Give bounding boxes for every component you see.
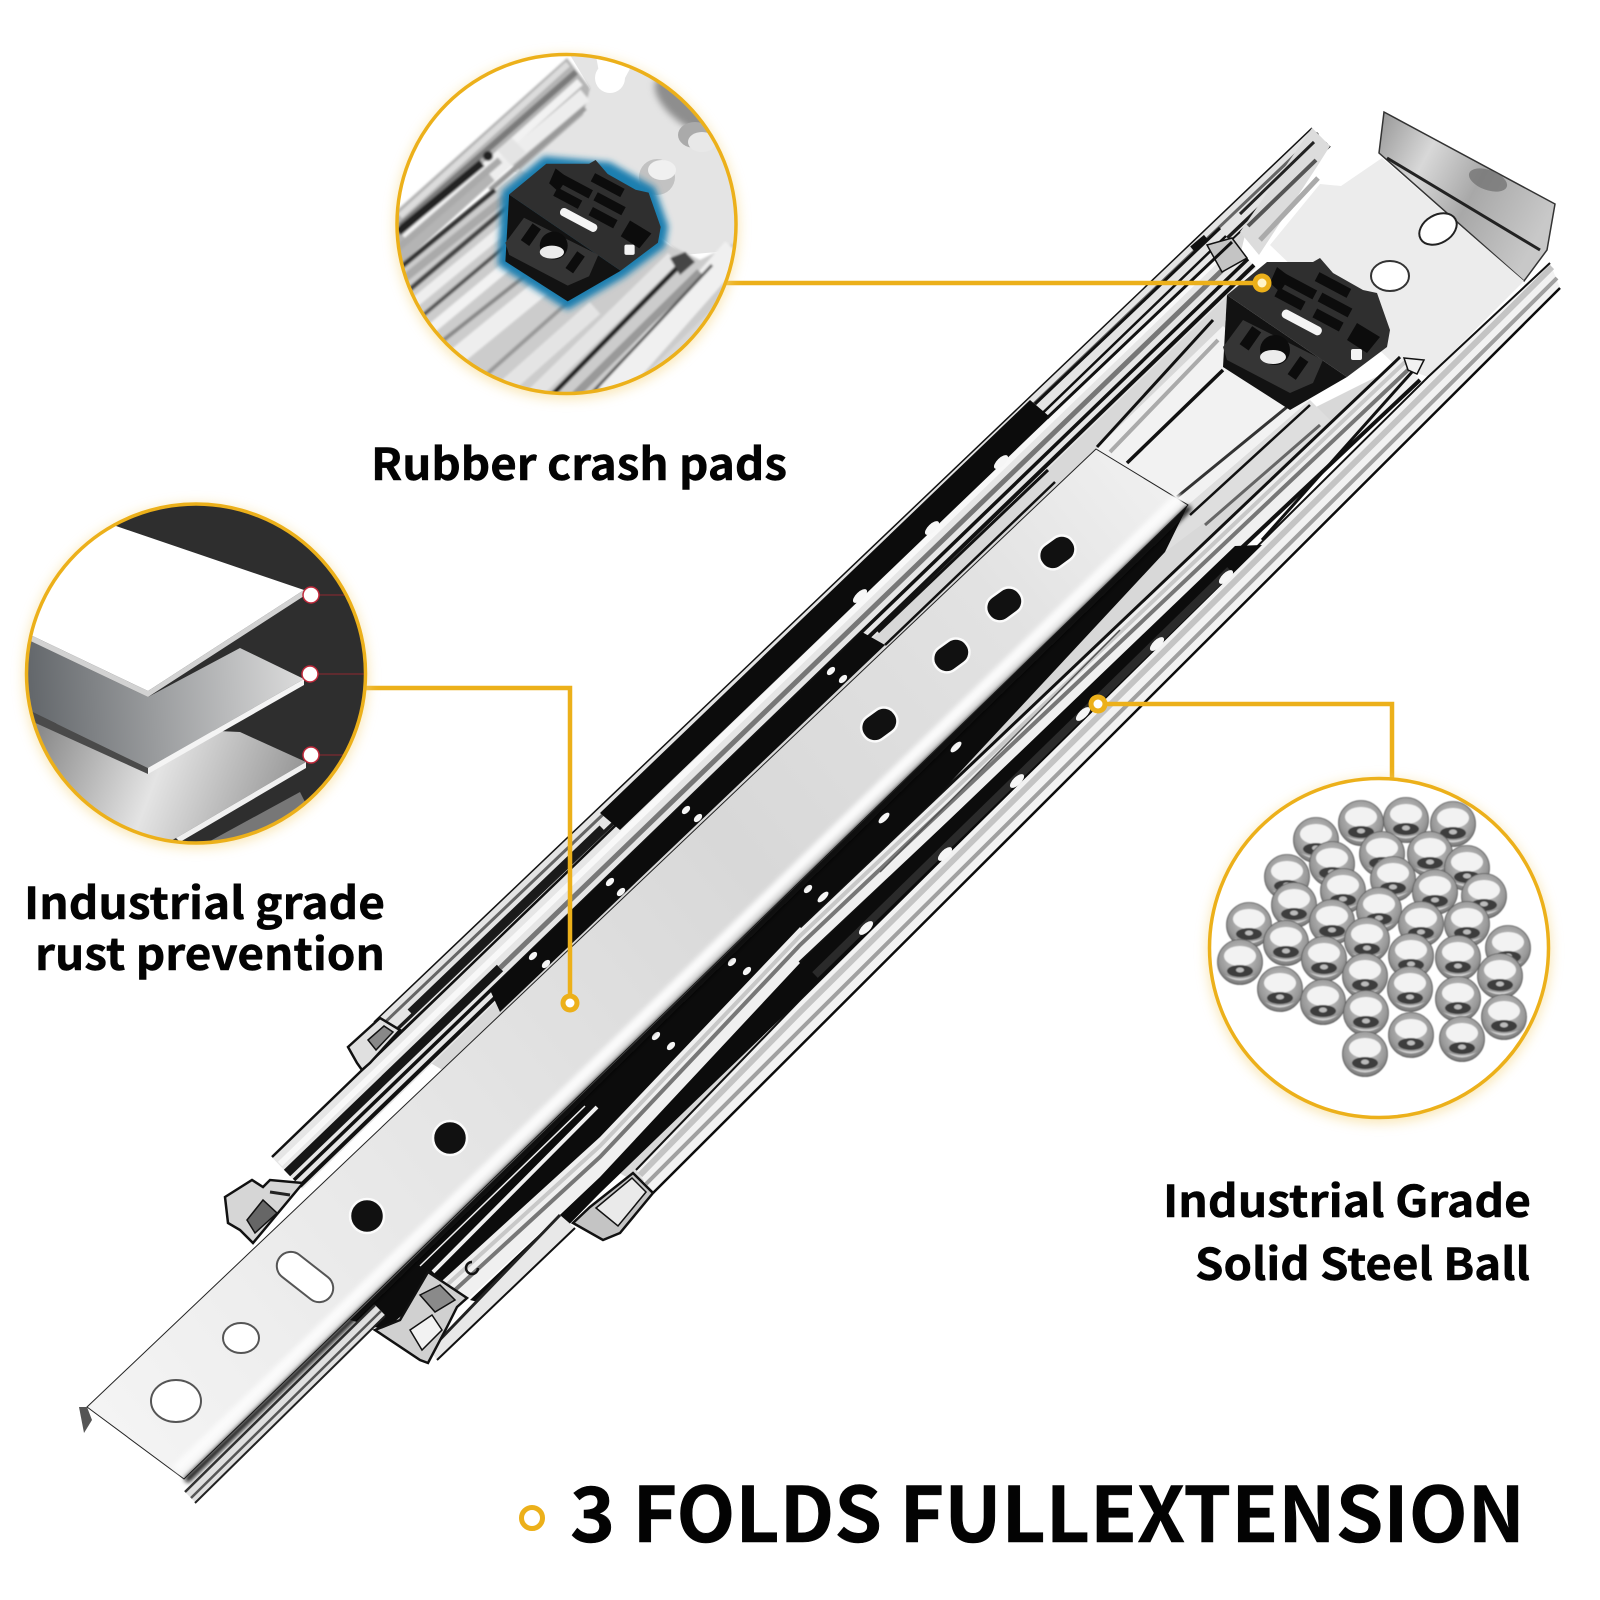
- near-end bracket: top rail: [348, 1018, 400, 1070]
- rear rubber crash pad: [1223, 258, 1390, 410]
- black ball-race strips: [350, 228, 1412, 1330]
- steel balls cluster: [1218, 798, 1530, 1076]
- callout dot: steel ball: [1088, 694, 1108, 714]
- label: rubber crash pads: Rubber crash pads: [371, 429, 787, 493]
- chrome rails lower: [395, 190, 595, 395]
- coating sheet 2: [20, 636, 304, 774]
- panel: rust prevention layers circle: [20, 500, 370, 852]
- callout line: steel ball: [1088, 694, 1392, 781]
- near-end thin rail: [430, 1215, 575, 1360]
- label: industrial grade rust prevention: rust prevention: [35, 919, 385, 983]
- far mounting plate: [1270, 158, 1524, 377]
- label: industrial grade solid steel ball: Industrial Grade: [1163, 1166, 1531, 1230]
- panel: rubber crash pad detail circle: [390, 50, 745, 400]
- far mounting flap: [1379, 112, 1555, 281]
- inner member flange: [185, 1305, 385, 1503]
- callout dot: rust prevention: [560, 994, 580, 1012]
- second rail: [272, 235, 1254, 1186]
- callout line: crash pads: [725, 274, 1272, 292]
- panel mounting slots: [151, 1246, 339, 1422]
- near-end bracket: bottom rail: [573, 1173, 653, 1240]
- label: industrial grade solid steel ball: [1163, 1166, 1531, 1293]
- title bullet ring: [522, 1508, 542, 1528]
- label: industrial grade solid steel ball: Solid Steel Ball: [1195, 1229, 1530, 1293]
- panel: steel balls circle: [1207, 778, 1551, 1123]
- far rail end clip: [1404, 358, 1424, 374]
- label: industrial grade rust prevention: [24, 868, 385, 983]
- chrome rails upper: [395, 58, 590, 270]
- outer bottom rail: [636, 263, 1560, 1193]
- crash pad with blue highlight: [505, 160, 661, 301]
- near-end bracket: second rail: [225, 1180, 303, 1243]
- inner channel beyond panel: [1096, 320, 1335, 552]
- race ball-cage slots: [527, 453, 1235, 1052]
- panel holes: [350, 530, 1081, 1233]
- label: industrial grade rust prevention: Industrial grade: [24, 868, 385, 932]
- title: 3 folds full extension: 3 FOLDS FULLEXTENSION: [570, 1454, 1525, 1564]
- near-end white lines in race: [420, 1106, 597, 1272]
- third rail: [443, 357, 1420, 1300]
- inner member panel: [79, 449, 1190, 1481]
- base fill between rails: [391, 205, 1400, 1185]
- callout dot: crash pads: [1252, 274, 1272, 292]
- coating sheet 3: [36, 723, 306, 841]
- near-end bracket: third rail: [375, 1262, 478, 1363]
- top outer rail: [374, 128, 1330, 1040]
- coating sheet 1: [20, 520, 304, 697]
- layer marker dots: [302, 587, 319, 763]
- callout line: rust prevention: [364, 688, 580, 1012]
- plate with notch and holes: [510, 50, 740, 255]
- layer marker lines: [318, 594, 364, 756]
- chrome rails right: [533, 250, 745, 398]
